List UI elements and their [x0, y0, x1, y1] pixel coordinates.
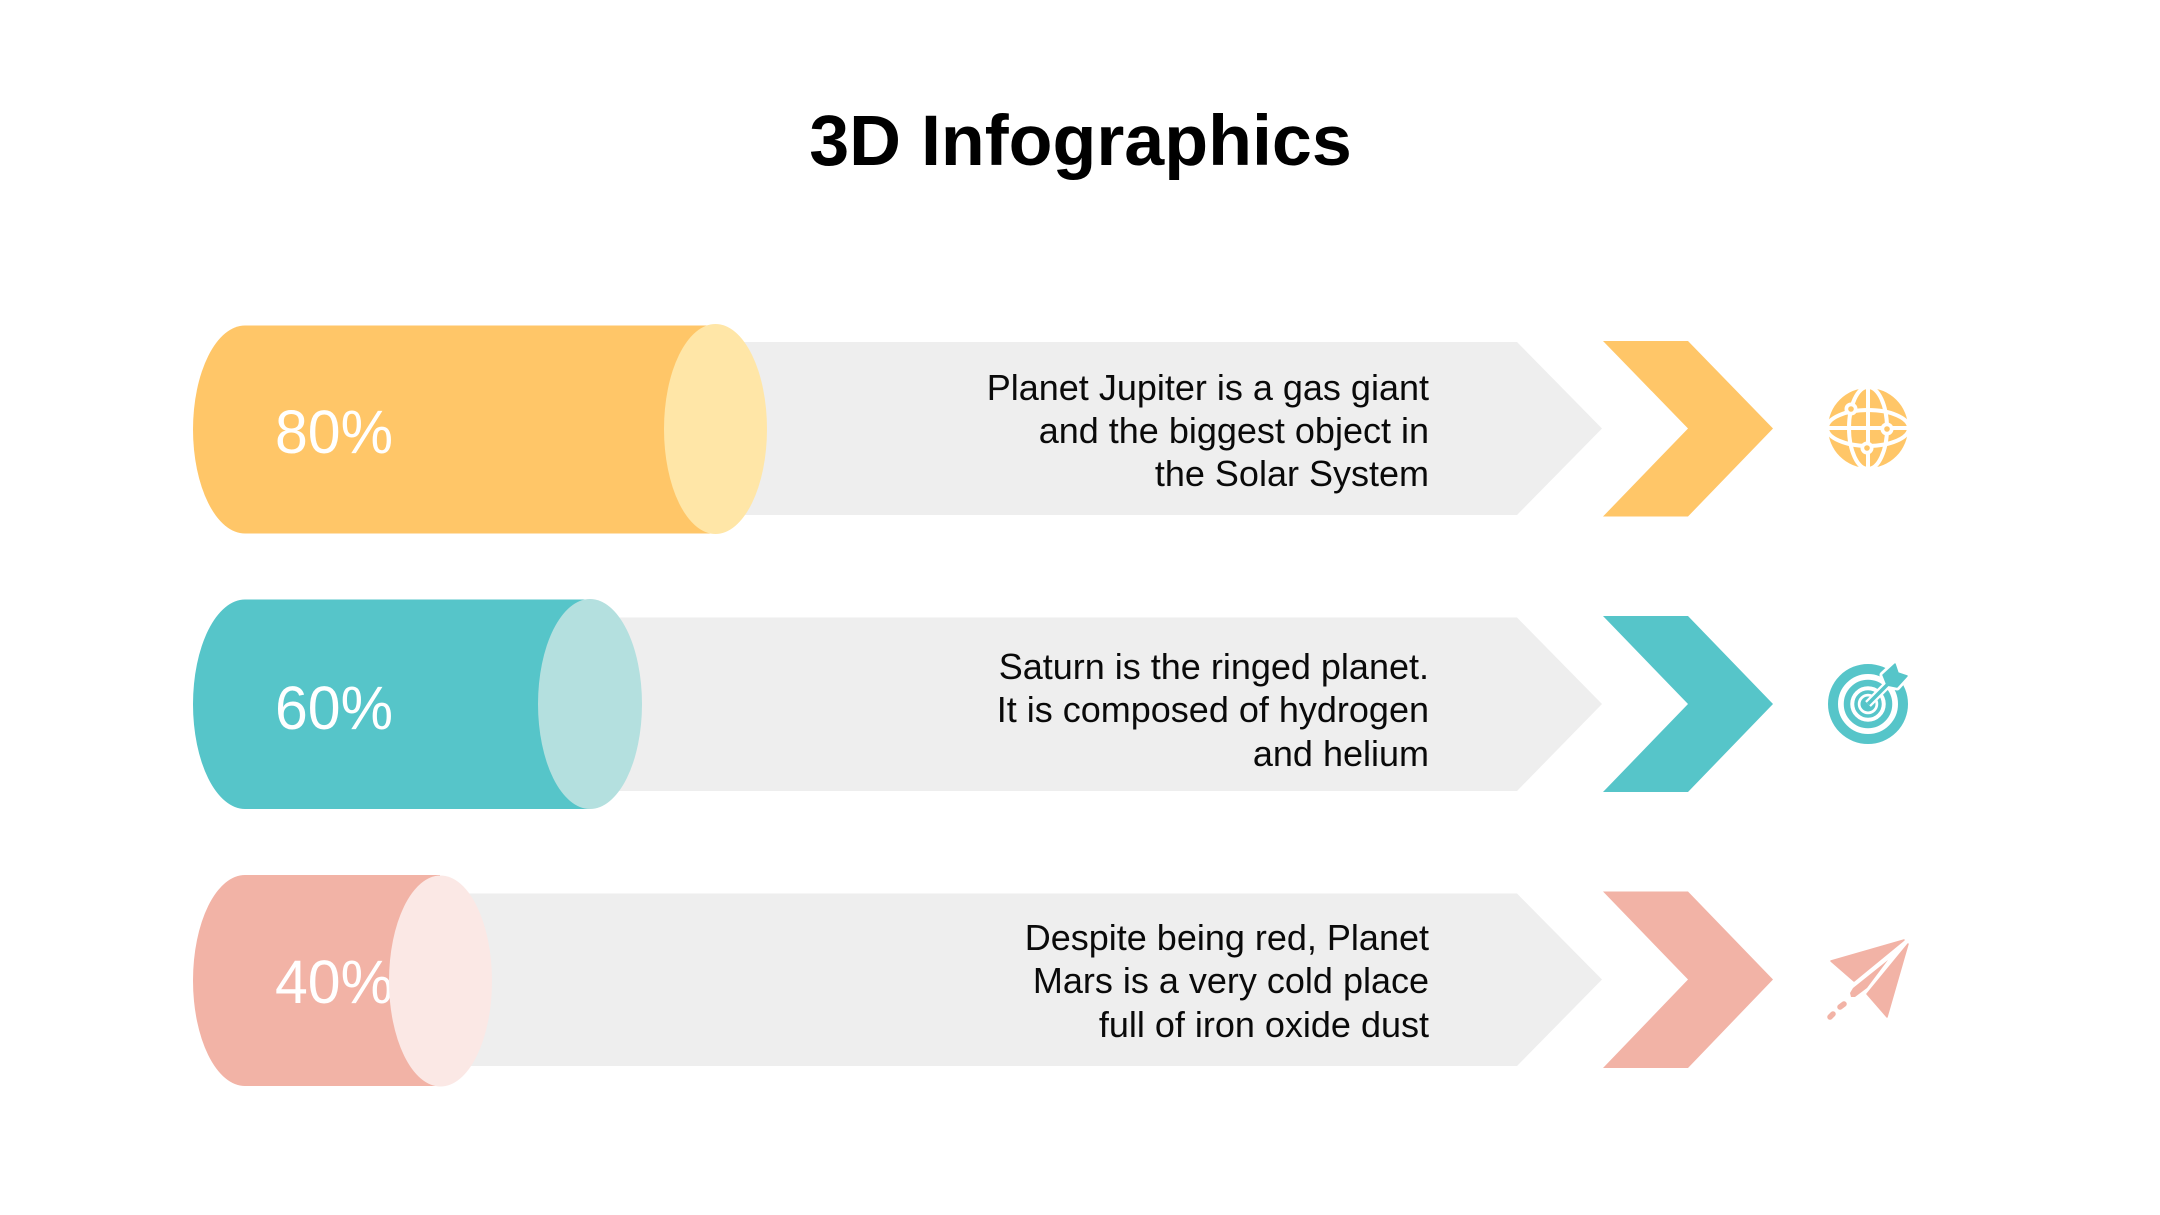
cylinder: 80% [193, 324, 767, 534]
title: 3D Infographics [809, 101, 1352, 181]
cylinder: 60% [193, 599, 642, 809]
percentage: 40%: 40% [275, 948, 393, 1016]
grey arrow: row 1 [700, 342, 1602, 515]
icon: target [1833, 664, 1907, 739]
description: Jupiter: Planet Jupiter is a gas giant [987, 367, 1429, 408]
icon: globe [1827, 387, 1909, 469]
description: Saturn: Saturn is the ringed planet. [999, 646, 1429, 687]
description: Mars: Despite being red, Planet [1025, 917, 1429, 958]
description: Jupiter [987, 367, 1429, 494]
percentage: 80%: 80% [275, 398, 393, 466]
description: Mars: Mars is a very cold place [1033, 960, 1429, 1001]
chevron: row 2 [1603, 616, 1773, 792]
description: Saturn [997, 646, 1429, 774]
percentage: 60%: 60% [275, 674, 393, 742]
description: Saturn: and helium [1253, 733, 1429, 774]
chevron: row 3 [1603, 892, 1773, 1068]
description: Mars [1025, 917, 1429, 1045]
cylinder cap: 40% [389, 876, 492, 1086]
grey arrow: row 3 [450, 894, 1602, 1066]
row 3: Mars 40% [193, 875, 1908, 1086]
description: Jupiter: the Solar System [1155, 453, 1429, 494]
row 2: Saturn 60% [193, 599, 1907, 809]
description: Saturn: It is composed of hydrogen [997, 689, 1429, 730]
description: Mars: full of iron oxide dust [1099, 1004, 1429, 1045]
chevron: row 1 [1603, 341, 1773, 516]
description: Jupiter: and the biggest object in [1039, 410, 1429, 451]
grey arrow: row 2 [600, 618, 1602, 791]
cylinder: 40% [193, 875, 440, 1086]
row 1: Jupiter 80% [193, 324, 1909, 534]
icon: paper plane [1830, 940, 1908, 1017]
